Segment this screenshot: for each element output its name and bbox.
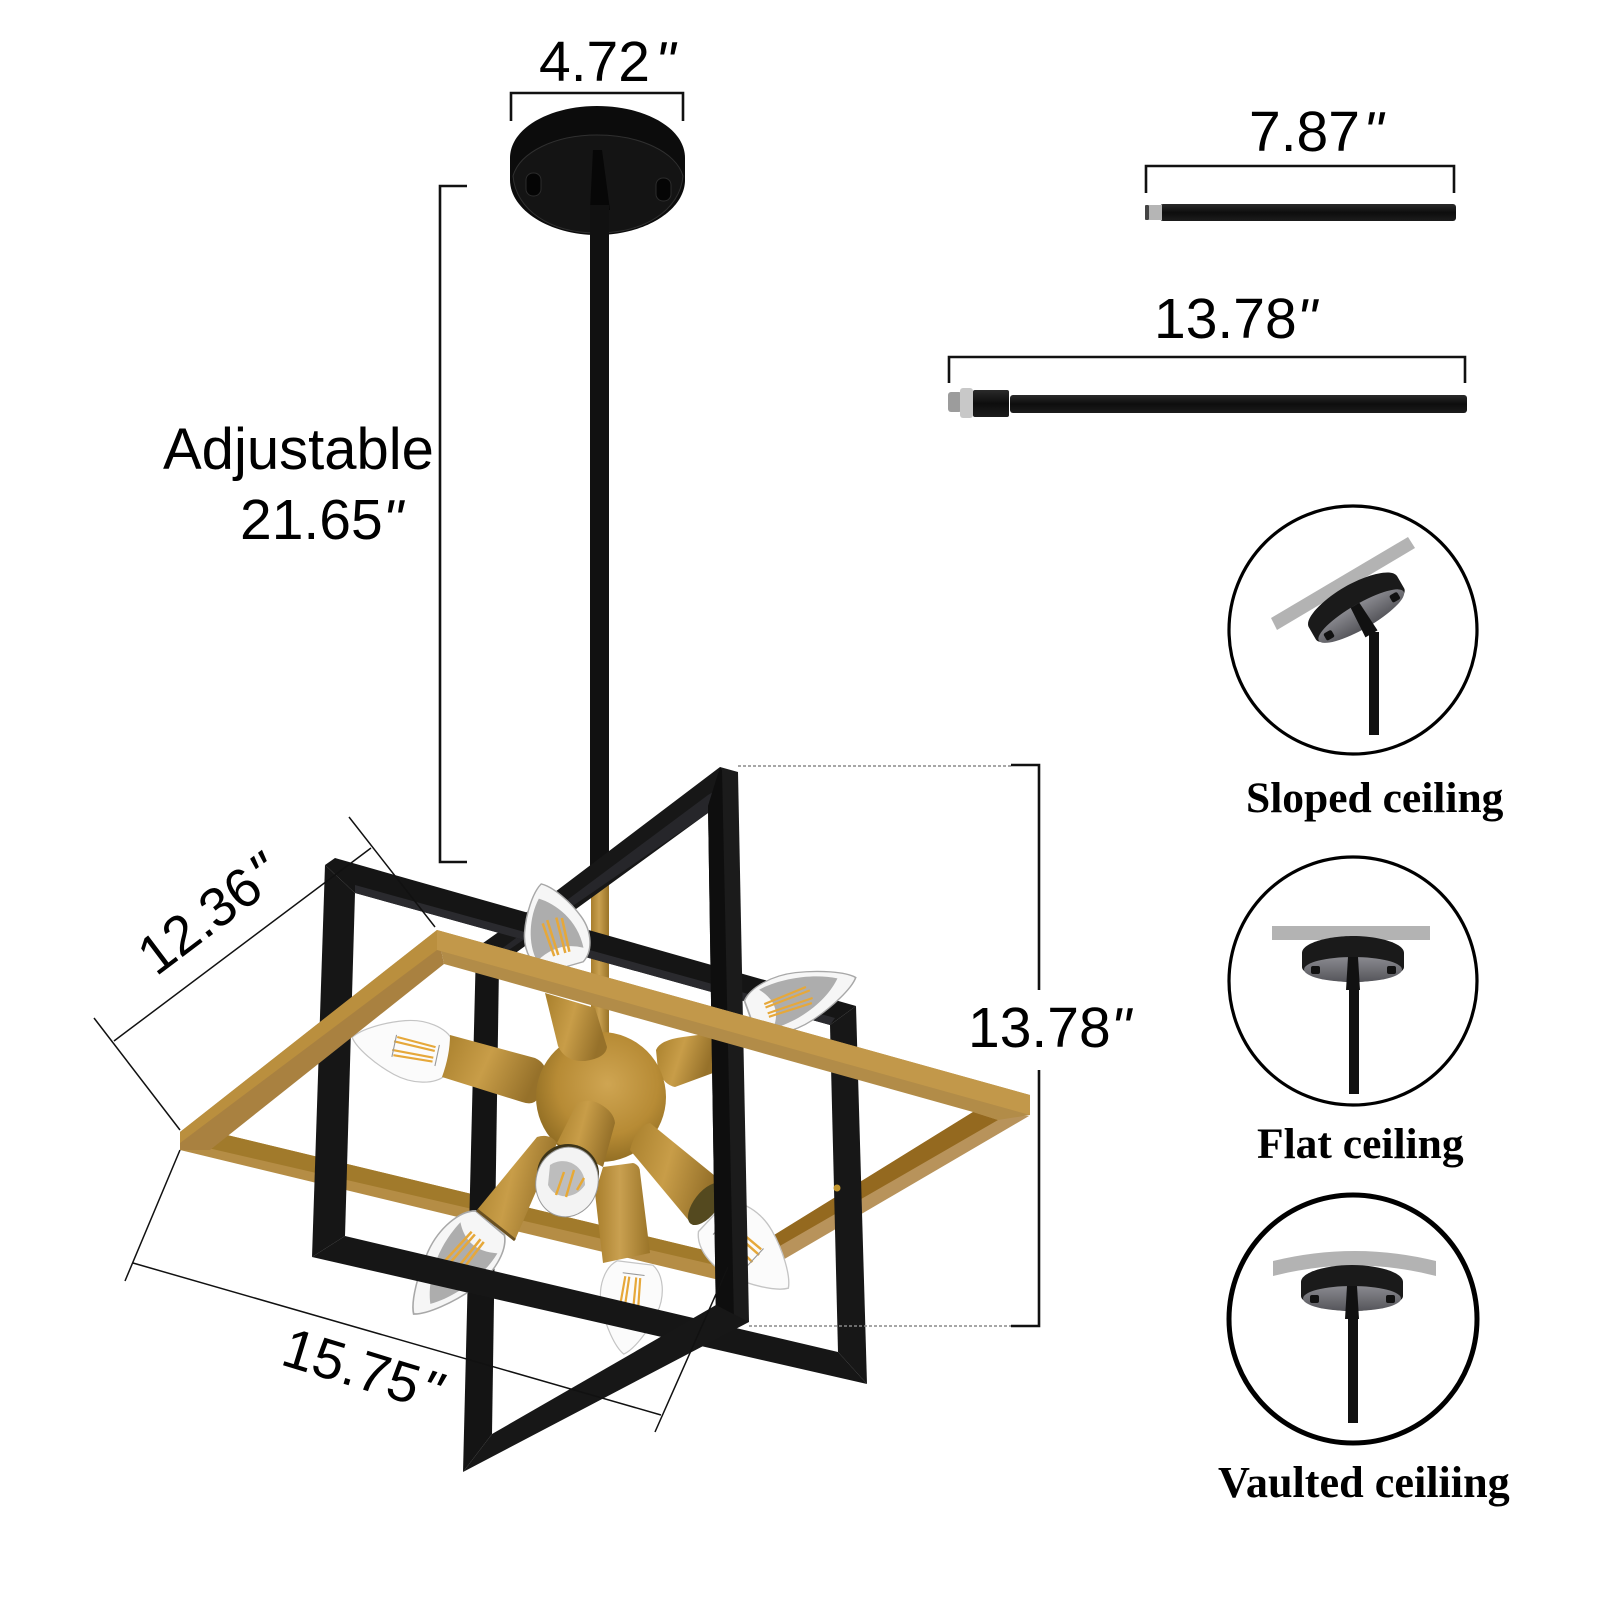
icon: ceiling canopy bbox=[510, 106, 685, 235]
dimension: depth 12.36: 12.36" bbox=[126, 840, 292, 987]
dimension: adjustable height: Adjustable bbox=[163, 417, 434, 482]
dimension: height 13.78: 13.78" bbox=[968, 996, 1134, 1060]
icon: flat ceiling bbox=[1229, 857, 1477, 1105]
light bulbs behind arms bbox=[346, 875, 865, 1358]
wide black frame bottom bar bbox=[312, 1236, 867, 1384]
extension rod 13.78 bbox=[948, 287, 1467, 418]
gold screw bbox=[834, 1184, 840, 1192]
extension rod 7.87: 7.87" bbox=[1249, 100, 1386, 164]
tall black frame bottom bar bbox=[463, 1305, 749, 1472]
dimension: width 15.75: 15.75" bbox=[275, 1315, 451, 1423]
label: vaulted ceiling: Vaulted ceiliing bbox=[1218, 1458, 1510, 1507]
tall black frame right post bbox=[708, 767, 749, 1322]
downrod bbox=[590, 205, 609, 895]
dimension: depth 12.36 bbox=[94, 817, 435, 1130]
front light bulb bbox=[528, 1141, 606, 1223]
tall black frame rear bars bbox=[463, 767, 720, 1472]
dimension: adjustable height bbox=[163, 186, 467, 862]
sputnik arms and sphere bbox=[442, 993, 731, 1263]
dimension: adjustable height: 21.65" bbox=[240, 488, 406, 552]
gold frame lower bars bbox=[180, 1112, 1029, 1285]
dimension: canopy width 4.72 bbox=[511, 30, 683, 121]
label: flat ceiling: Flat ceiling bbox=[1257, 1120, 1464, 1168]
dimension: height 13.78 bbox=[738, 765, 1134, 1326]
gold center rod bbox=[591, 882, 609, 1047]
icon: sloped ceiling bbox=[1229, 506, 1477, 754]
wide black frame rear bars bbox=[312, 858, 867, 1384]
dimension: canopy width 4.72: 4.72" bbox=[539, 30, 678, 94]
extension rod 7.87 bbox=[1145, 100, 1456, 221]
dimension: width 15.75 bbox=[125, 1150, 728, 1432]
label: sloped ceiling: Sloped ceiling bbox=[1246, 774, 1504, 822]
gold frame upper bars bbox=[180, 930, 1030, 1150]
extension rod 13.78: 13.78" bbox=[1154, 287, 1320, 351]
icon: vaulted ceiling bbox=[1229, 1195, 1477, 1443]
